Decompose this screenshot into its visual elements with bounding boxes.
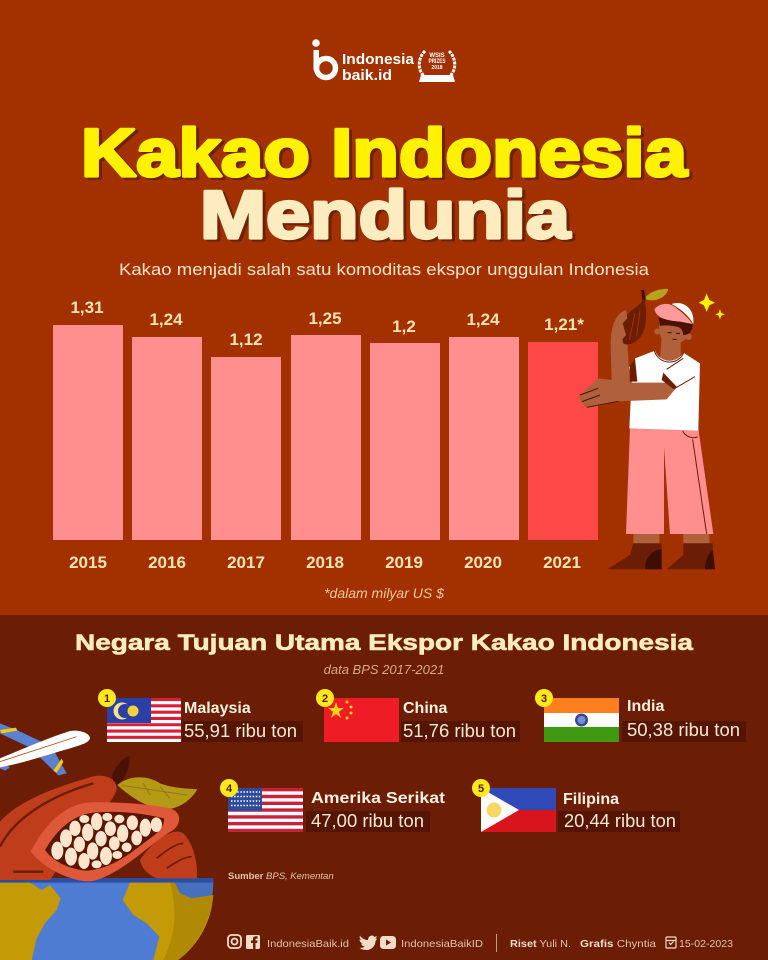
name: Malaysia [184,700,251,717]
value: 20,44 ribu ton [564,811,676,831]
illustration: cocoa pods and leaf [0,756,197,881]
bar 2015 [53,298,123,572]
bar 2017: 2017 [227,553,265,572]
credit: research: Riset Yuli N. [510,938,571,950]
name: China [403,700,448,717]
bar 2021: 2021 [543,553,581,572]
value: 51,76 ribu ton [403,721,516,741]
name: India [627,698,664,715]
bar 2018: 1,25 [308,309,342,328]
icon: twitter [360,935,378,950]
icon: award badge: PRIZES [428,59,446,65]
title line 2: Mendunia [200,177,571,253]
value: 47,00 ribu ton [311,811,424,831]
logo: Indonesia Baik: baik.id [342,67,392,84]
illustration: globe [0,878,213,960]
icon: award badge: WSIS [429,53,445,59]
icon: youtube [380,936,396,949]
icon: award badge: 2018 [431,65,443,71]
country 5: Filipina [472,779,680,832]
section heading: Negara Tujuan Utama Ekspor Kakao Indonesia [75,630,694,655]
bar 2019 [370,317,440,572]
bar 2017 [211,330,281,572]
illustration: airplane [0,723,90,775]
rank badge 4 [220,779,238,797]
upper background panel [0,0,768,615]
bar 2019: 1,2 [392,317,416,336]
rank badge 1: 1 [104,693,110,705]
source note: Sumber BPS, Kementan [228,871,334,882]
rank badge 2 [316,689,334,707]
credit: graphics: Grafis Chyntia [580,938,656,950]
rank badge 3: 3 [541,693,547,705]
logo: Indonesia Baik [312,39,415,84]
footer: social and credits [228,934,733,952]
rank badge 5 [472,779,490,797]
flag: USA [228,788,303,832]
rank badge 1 [98,689,116,707]
divider [496,934,497,952]
section subheading: data BPS 2017-2021 [324,662,444,677]
title line 1: Kakao Indonesia [81,115,688,191]
value: 55,91 ribu ton [184,721,297,741]
icon: facebook [246,935,260,949]
handle: IndonesiaBaikID [401,938,483,950]
bar 2020: 1,24 [466,310,500,329]
bar 2019: 2019 [385,553,423,572]
bar 2015: 1,31 [70,298,104,317]
rank badge 3 [535,689,553,707]
country 4: Amerika Serikat [220,779,446,832]
rank badge 4: 4 [226,783,233,795]
country 3: India [535,689,746,742]
country 2: China [316,689,520,742]
bar 2016: 2016 [148,553,186,572]
icon: award badge [419,51,455,82]
bar 2017: 1,12 [229,330,263,349]
flag: Philippines [481,788,556,832]
subtitle: Kakao menjadi salah satu komoditas ekspor unggulan Indonesia [119,260,650,279]
bar 2015: 2015 [69,553,107,572]
icon: calendar [666,937,676,948]
date: 15-02-2023 [679,938,733,950]
name: Amerika Serikat [311,790,446,807]
icon: instagram [228,935,241,948]
title: Kakao Indonesia Mendunia [81,115,688,253]
bar 2016 [132,310,202,572]
rank badge 5: 5 [478,783,484,795]
flag: Malaysia [107,698,181,742]
bar 2018 [291,309,361,572]
name: Filipina [563,791,619,808]
flag: China [324,698,399,742]
bar 2021: 1,21* [544,315,584,334]
value: 50,38 ribu ton [627,720,740,740]
handle: IndonesiaBaik.id [267,938,349,950]
bar 2020: 2020 [464,553,502,572]
logo: Indonesia Baik: Indonesia [342,51,415,68]
bar 2018: 2018 [306,553,344,572]
flag: India [544,698,619,742]
bar 2020 [449,310,519,572]
country 1: Malaysia [98,689,303,742]
bar chart: cocoa export value [53,298,598,572]
illustration: farmer holding cocoa pod [579,289,725,569]
lower background panel [0,615,768,960]
bar 2021 [528,315,598,572]
chart unit note: *dalam milyar US $ [324,585,444,601]
rank badge 2: 2 [322,693,328,705]
bar 2016: 1,24 [149,310,183,329]
